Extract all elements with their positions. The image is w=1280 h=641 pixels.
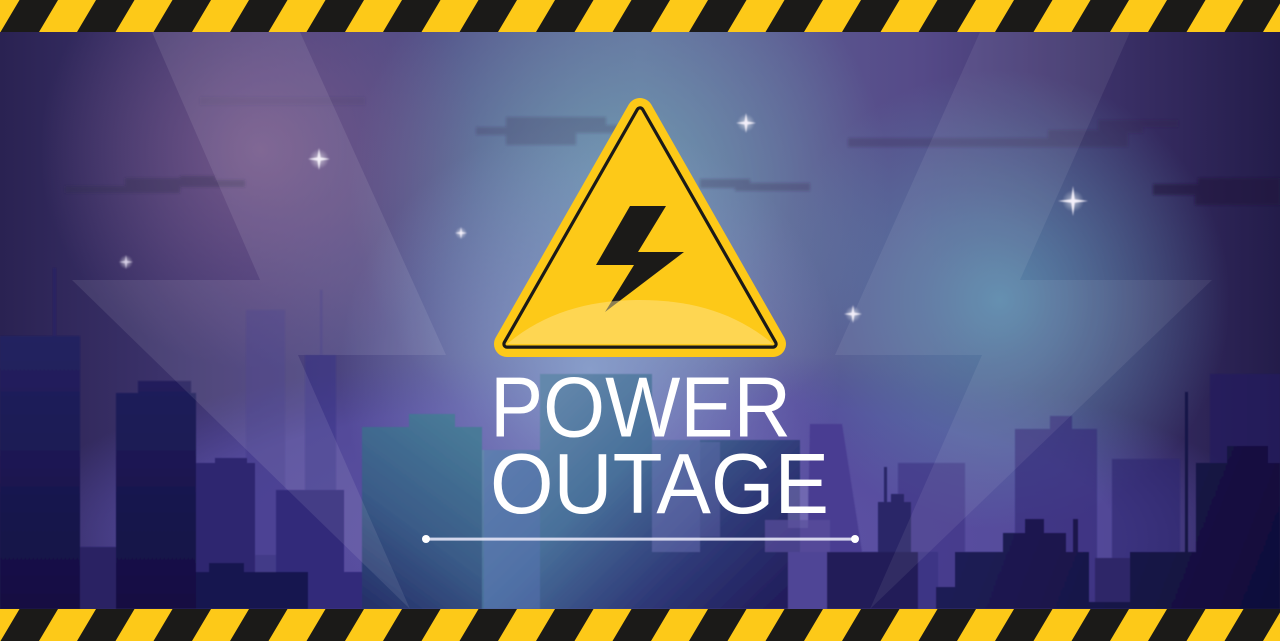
front buildings: [0, 268, 1280, 609]
triangle outer: [507, 111, 773, 344]
star: [119, 255, 133, 269]
star: [1058, 186, 1088, 216]
star: [844, 305, 862, 323]
lightning bolt: [596, 206, 684, 312]
warning triangle icon: [507, 111, 773, 344]
central block: [482, 374, 800, 609]
stars: [119, 113, 1088, 323]
teal building: [362, 414, 482, 609]
clouds: [65, 97, 1280, 205]
title line two: OUTAGE: [490, 437, 829, 532]
skyline: [0, 268, 1280, 609]
title line one: POWER: [490, 360, 791, 456]
middle buildings: [80, 374, 830, 609]
star: [736, 113, 756, 133]
bottom hazard stripe: [0, 609, 1280, 641]
divider with end dots: [422, 535, 859, 543]
left lightning beam: [72, 32, 446, 609]
triangle inner fill: [507, 111, 773, 344]
glossy highlight: [507, 300, 773, 344]
right lightning beam: [835, 32, 1212, 609]
light columns: [484, 450, 540, 609]
top hazard stripe: [0, 0, 1280, 32]
back buildings: [246, 290, 1280, 609]
star: [308, 148, 330, 170]
star: [455, 227, 467, 239]
triangle inner line: [507, 111, 773, 344]
title: [490, 360, 829, 532]
